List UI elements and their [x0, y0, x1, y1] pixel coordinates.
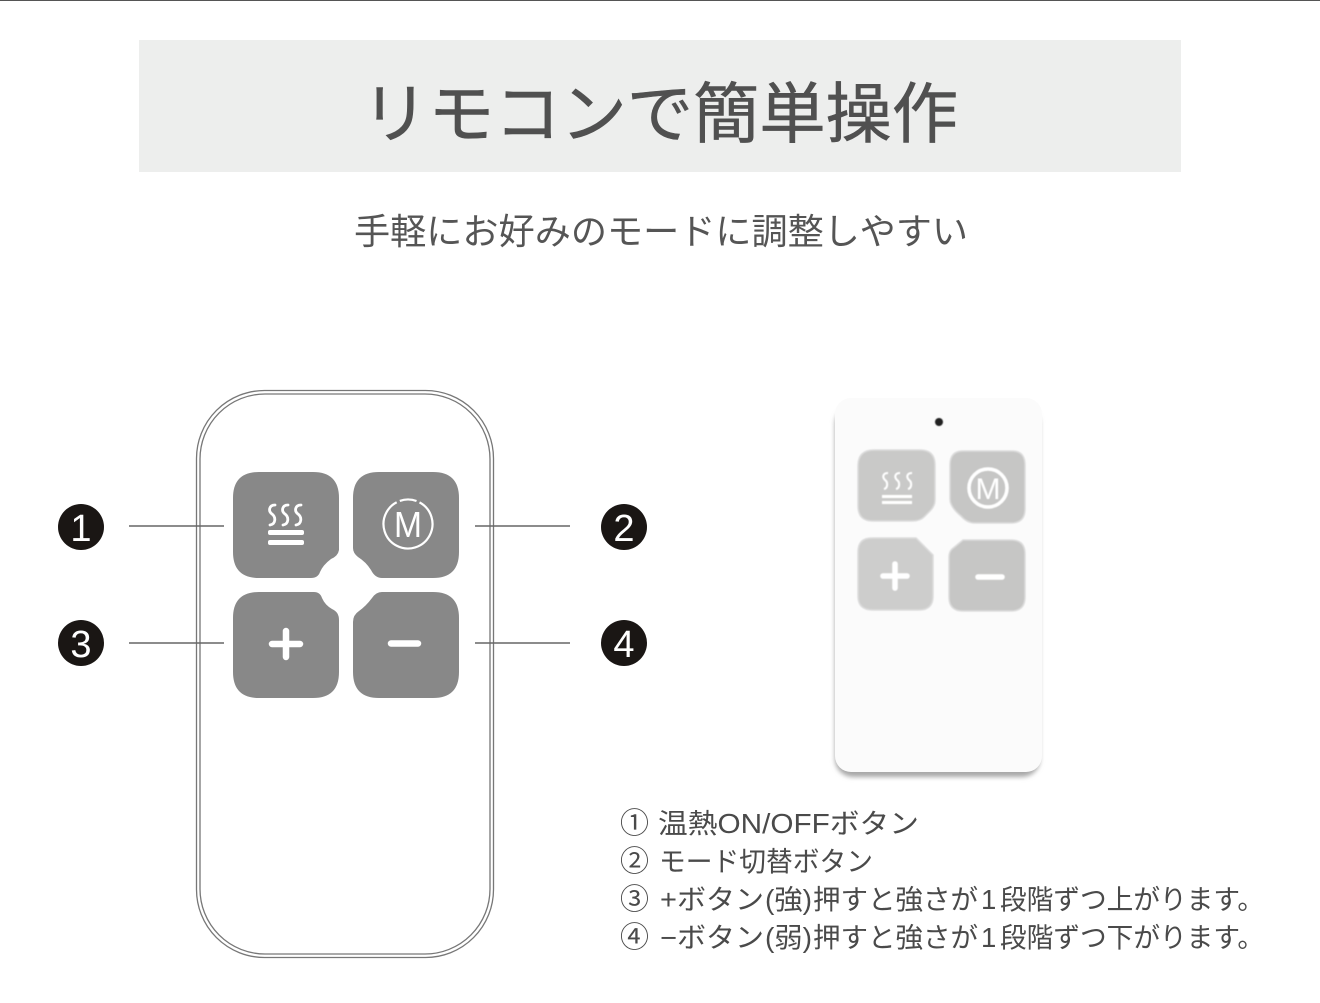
- button 1: heat: [233, 472, 339, 578]
- photo button 2: M: [976, 473, 1000, 506]
- legend line 3: +ボタン: [660, 884, 764, 915]
- photo button 4: [949, 540, 1025, 611]
- button legend: [620, 808, 1264, 954]
- remote diagram: [196, 390, 494, 958]
- subtitle: 手軽にお好みのモードに調整しやすい: [354, 211, 968, 252]
- callout 3: 3: [70, 624, 92, 666]
- legend line 2: モード切替ボタン: [659, 846, 873, 877]
- legend line 4: 押すと強さが: [813, 922, 978, 953]
- callout 3: [58, 620, 224, 666]
- callout 4: [475, 620, 647, 666]
- callout 4: 4: [613, 624, 635, 666]
- legend line 3: 段階ずつ上がります。: [1000, 884, 1264, 915]
- button 3: plus: [233, 592, 339, 698]
- legend line 4: [620, 922, 1264, 954]
- title: リモコンで簡単操作: [362, 77, 958, 151]
- legend line 4: (弱): [765, 922, 812, 953]
- legend line 2: ②: [620, 846, 649, 878]
- button 2: mode: M: [394, 504, 422, 545]
- legend line 3: 押すと強さが: [813, 884, 978, 915]
- indicator dot: [935, 418, 943, 426]
- button 2: mode: [353, 472, 459, 578]
- photo button 3: [858, 538, 933, 610]
- callout 2: 2: [613, 508, 635, 550]
- title banner: [139, 40, 1181, 172]
- remote photo: [835, 398, 1042, 777]
- legend line 3: 1: [981, 884, 996, 915]
- legend line 1: 温熱ON/OFFボタン: [658, 808, 919, 839]
- callout 1: [58, 504, 224, 550]
- button 4: minus: [353, 592, 459, 698]
- legend line 3: (強): [765, 884, 812, 915]
- callout 1: 1: [70, 508, 92, 550]
- legend line 4: ④: [620, 922, 649, 954]
- legend line 3: ③: [620, 884, 649, 916]
- legend line 4: 段階ずつ下がります。: [1000, 922, 1264, 953]
- legend line 1: ①: [620, 808, 649, 840]
- legend line 4: −ボタン: [660, 922, 764, 953]
- photo button 2: [950, 451, 1025, 523]
- legend line 3: [620, 884, 1264, 916]
- legend line 4: 1: [981, 922, 996, 953]
- remote outline: [196, 390, 494, 958]
- photo button 1: [858, 450, 935, 521]
- callout 2: [475, 504, 647, 550]
